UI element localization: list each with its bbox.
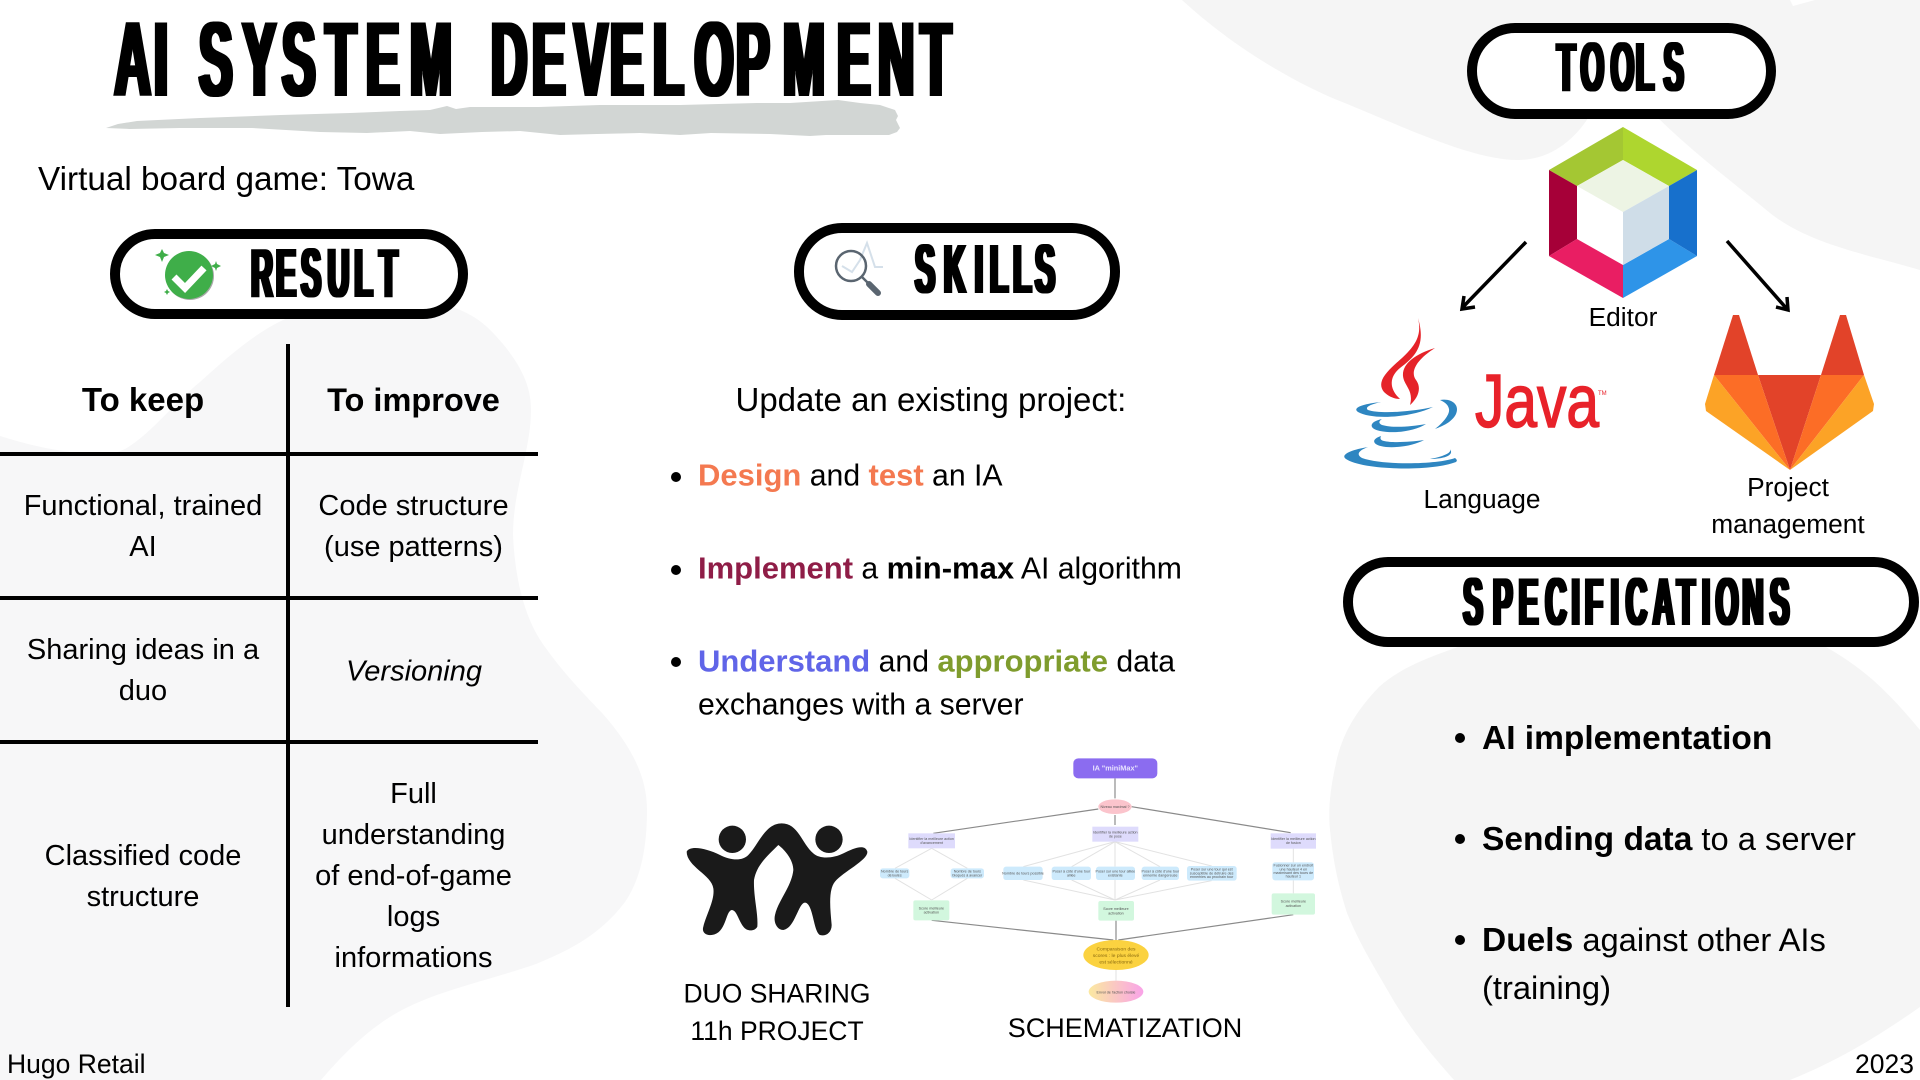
icon: green check badge (155, 249, 221, 300)
background blob: specifications (1329, 647, 1920, 1080)
specifications bullet list (1455, 720, 1856, 1006)
column headers: To keep (82, 381, 204, 418)
heading pill: result (115, 234, 463, 314)
skills bullet list: Understand and appropriate data (698, 644, 1175, 678)
flowchart: minimax schematization: Score meilleure (919, 906, 944, 910)
background blob: top right (1182, 0, 1920, 270)
label: language: Language (1423, 484, 1541, 514)
flowchart: minimax schematization: bloqués à avancer (952, 873, 983, 877)
flowchart: minimax schematization: hauteur 1 (1286, 875, 1301, 879)
label: project management: Project (1747, 472, 1830, 502)
column headers (82, 381, 500, 418)
table grid lines (0, 344, 538, 1007)
flowchart: minimax schematization: de fusion (1286, 841, 1301, 845)
column: to improve: understanding (322, 819, 505, 851)
flowchart: minimax schematization: Score meilleure (1103, 907, 1129, 911)
column: to keep: Sharing ideas in a (27, 634, 260, 666)
column: to improve: Code structure (318, 490, 509, 522)
skills bullet list: Implement a min-max AI algorithm (698, 550, 1182, 586)
flowchart: minimax schematization: Identifier la meilleure action (1093, 830, 1138, 834)
flowchart: minimax schematization: Poser sur une tour qui est (1191, 868, 1233, 872)
flowchart: minimax schematization: Poser à côté d'une tour (1141, 870, 1180, 874)
column: to improve: Full (390, 778, 437, 810)
skills bullet list: exchanges with a server (698, 688, 1024, 722)
footer: author: Hugo Retail (7, 1049, 145, 1079)
column: to improve: informations (335, 942, 492, 974)
label: editor: Editor (1589, 302, 1658, 332)
specifications bullet list: (training) (1482, 969, 1611, 1006)
flowchart: minimax schematization: une hauteur 4 en (1280, 867, 1307, 871)
panel: result (115, 234, 463, 314)
title brush stroke (106, 100, 900, 136)
caption: duo sharing: DUO SHARING (684, 978, 870, 1008)
heading pill: specifications (1348, 562, 1914, 642)
table: to keep / to improve (0, 344, 538, 1007)
column headers: To improve (327, 382, 500, 418)
caption: schematization: SCHEMATIZATION (1008, 1013, 1242, 1043)
column: to keep: AI (129, 531, 157, 563)
flowchart: minimax schematization: ennemie dangereuse (1143, 873, 1178, 877)
specifications bullet list: Sending data to a server (1482, 820, 1856, 858)
flowchart: minimax schematization: scores : le plus élevé (1093, 953, 1139, 959)
flowchart: minimax schematization: Niveau maximal ? (1100, 805, 1130, 809)
column: to improve: of end-of-game (315, 860, 512, 892)
logo: java: Java (1475, 359, 1599, 443)
caption: duo sharing: 11h PROJECT (690, 1016, 864, 1046)
subtitle: Virtual board game: Towa (38, 161, 415, 198)
flowchart: minimax schematization: Nombre de tours (881, 870, 908, 874)
flowchart: minimax schematization: alliée (1067, 873, 1076, 877)
skills bullet list: Design and test an IA (698, 458, 1003, 492)
flowchart: minimax schematization: est sélectionné (1099, 960, 1133, 966)
flowchart: minimax schematization: de pose (1109, 834, 1122, 838)
flowchart: minimax schematization: activation (1286, 904, 1301, 908)
logo: java (1344, 318, 1607, 468)
flowchart: minimax schematization: existante (1108, 873, 1123, 877)
icon: netbeans editor (1549, 127, 1697, 298)
flowchart: minimax schematization: maximisant des tours de (1274, 871, 1313, 875)
title: AI SYSTEM DEVELOPMENT (114, 0, 951, 119)
flowchart: minimax schematization: IA "miniMax" (1093, 764, 1138, 773)
heading label: specifications: SPECIFICATIONS (1463, 565, 1789, 641)
flowchart: minimax schematization: susceptible de détruire des (1190, 871, 1234, 875)
heading label: skills: SKILLS (915, 231, 1055, 309)
panel: tools (1344, 28, 1874, 539)
logo: java: TM (1598, 391, 1607, 397)
column: to keep: Functional, trained (24, 490, 262, 522)
column: to keep (24, 490, 262, 913)
column: to improve: Versioning (346, 656, 482, 688)
caption: duo sharing (684, 978, 870, 1046)
flowchart: minimax schematization: Fusionner sur un endroit (1274, 864, 1313, 868)
flowchart: minimax schematization: Identifier la meilleure action (909, 837, 954, 841)
flowchart: minimax schematization: activation (924, 911, 939, 915)
heading label: result: RESULT (251, 235, 398, 313)
flowchart: minimax schematization: Comparaison des (1096, 946, 1136, 952)
flowchart: minimax schematization: ennemies au prochain tour (1190, 875, 1234, 879)
flowchart: minimax schematization: Nombre de tours possible (1002, 872, 1044, 876)
column: to improve (315, 490, 512, 974)
background blob: left (0, 298, 647, 1080)
column: to keep: Classified code (45, 840, 241, 872)
flowchart: minimax schematization: déroulés (888, 873, 902, 877)
label: project management: management (1711, 509, 1865, 539)
skills bullet list (671, 458, 1182, 722)
flowchart: minimax schematization (880, 758, 1316, 1003)
column: to improve: (use patterns) (324, 531, 503, 563)
column: to improve: logs (387, 901, 440, 933)
panel: specifications (1348, 562, 1914, 1006)
flowchart: minimax schematization: Poser sur une tour alliée (1096, 870, 1135, 874)
flowchart: minimax schematization: Nombre de tours (954, 870, 981, 874)
logo: gitlab (1705, 315, 1874, 470)
footer: year: 2023 (1855, 1049, 1914, 1079)
flowchart: minimax schematization: Poser à côté d'une tour (1052, 870, 1091, 874)
specifications bullet list: AI implementation (1482, 720, 1772, 757)
arrow: to gitlab (1727, 241, 1788, 310)
flowchart: minimax schematization: activation (1108, 911, 1124, 915)
column: to keep: structure (87, 881, 199, 913)
column: to keep: duo (119, 675, 167, 707)
specifications bullet list: Duels against other AIs (1482, 921, 1826, 959)
flowchart: minimax schematization: Score meilleure (1281, 900, 1306, 904)
label: project management (1711, 472, 1865, 539)
arrow: to java (1462, 242, 1526, 309)
flowchart: minimax schematization: d'avancement (920, 841, 943, 845)
flowchart: minimax schematization: Envoi de l'action choisie (1097, 990, 1135, 994)
flowchart: minimax schematization: Identifier la meilleure action (1271, 837, 1316, 841)
heading label: tools: TOOLS (1557, 29, 1684, 107)
skills intro: Update an existing project: (736, 381, 1126, 418)
icon: duo people (687, 823, 867, 935)
icon: magnifier (836, 243, 883, 293)
heading pill: skills (799, 228, 1115, 315)
panel: skills (671, 228, 1182, 722)
heading pill: tools (1472, 28, 1771, 114)
